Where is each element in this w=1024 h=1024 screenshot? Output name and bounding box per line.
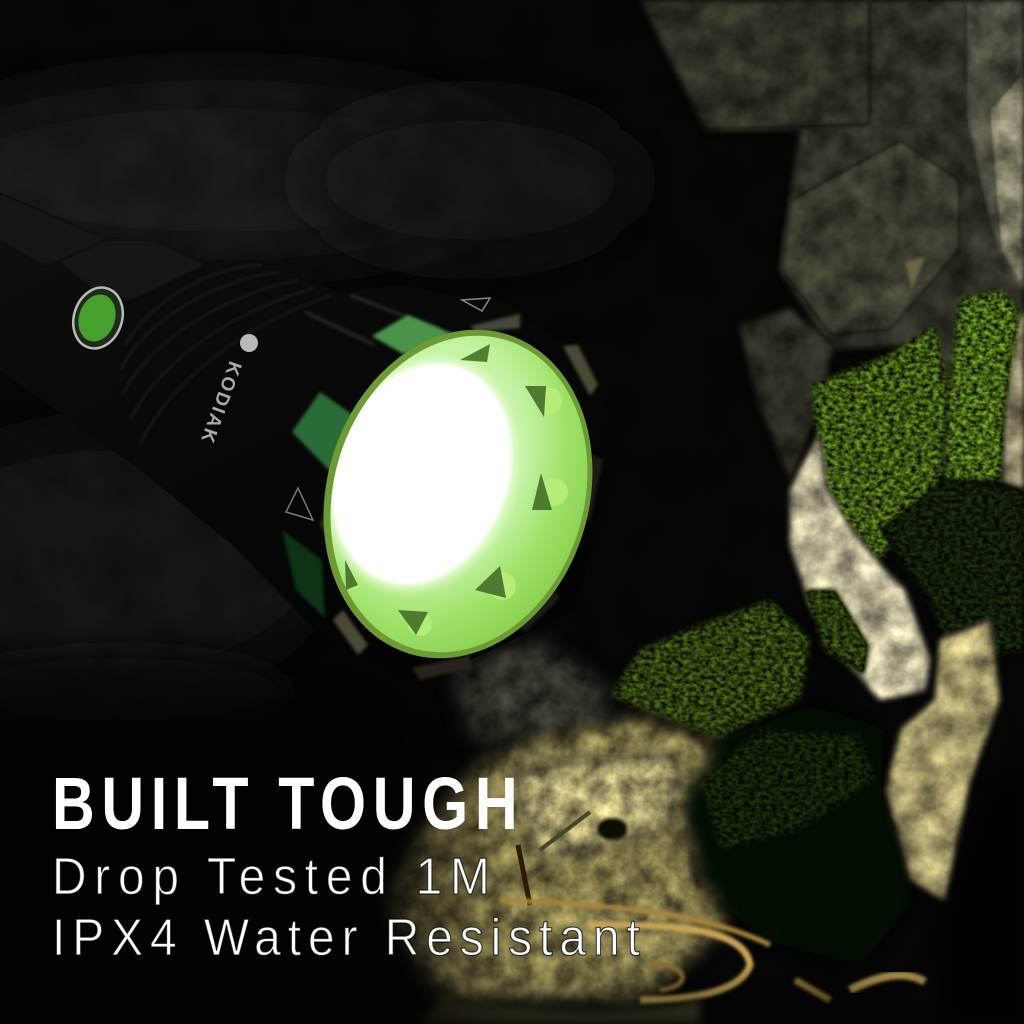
flashlight: [0, 192, 632, 692]
warning icon top: [462, 298, 490, 311]
bezel tabs: [320, 314, 603, 680]
green lens bezel: [284, 296, 632, 692]
left and bottom shadow for the text area: [0, 673, 958, 1024]
headline and feature text: [52, 763, 640, 966]
bezel notches: [345, 344, 568, 636]
head collar highlights: [305, 295, 440, 345]
moss patches on the right rock: [812, 290, 1024, 660]
knurled handle: [0, 195, 108, 265]
bezel inner face: [292, 303, 626, 685]
lower moss on ledge: [610, 600, 915, 965]
sunlit boulder: [790, 432, 1000, 900]
feature: drop tested: Drop Tested 1M: [52, 847, 490, 905]
title: BUILT TOUGH: [52, 763, 518, 846]
green reflection band lower: [282, 530, 325, 618]
brand logo mark: [240, 334, 258, 352]
cooling fins: [120, 265, 332, 445]
tail collar: [60, 240, 205, 300]
feature: water resistance: IPX4 Water Resistant: [52, 908, 640, 966]
brand name: KODIAK: [196, 358, 245, 447]
bright lens: [330, 354, 522, 595]
lit rock ground with straw: [385, 640, 925, 1024]
warning icon lower: [286, 488, 313, 520]
green reflection band top: [372, 315, 458, 359]
green reflection band middle: [292, 392, 366, 472]
flashlight body: [0, 192, 612, 682]
rock wall upper right: [640, 0, 1024, 490]
power button: [66, 281, 130, 355]
